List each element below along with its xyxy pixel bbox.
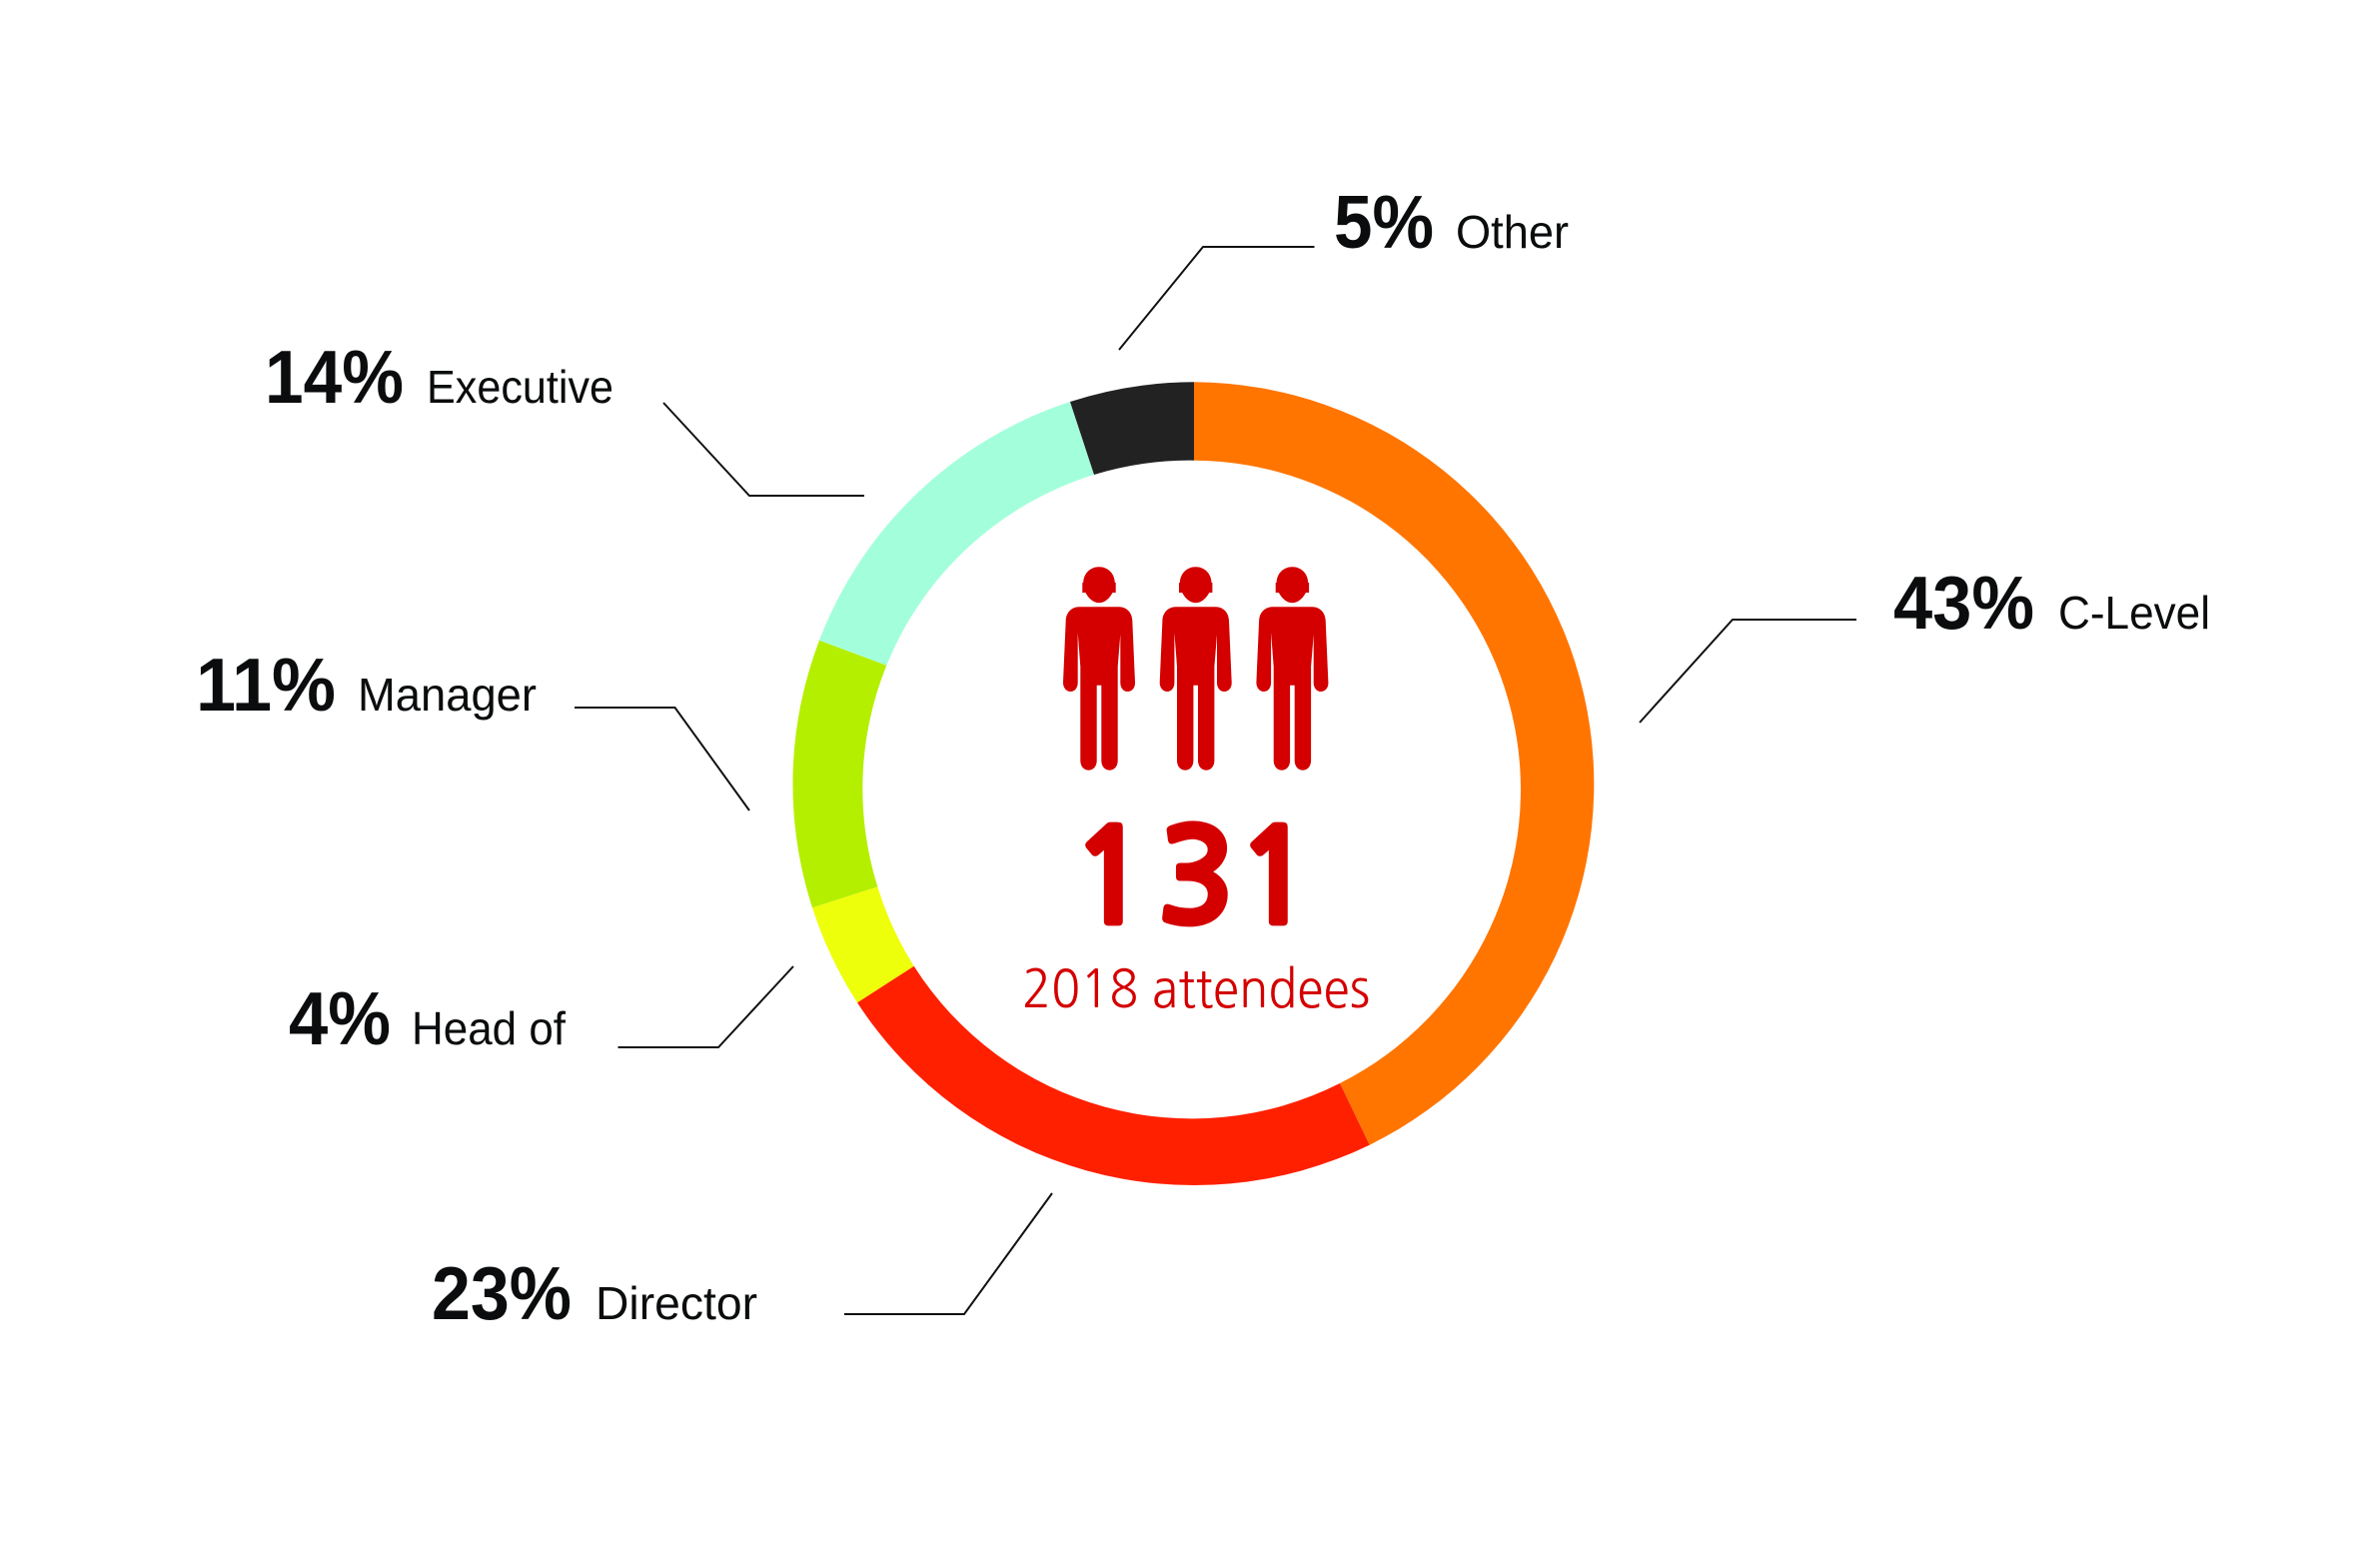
value: 23% xyxy=(432,1251,572,1335)
leader line xyxy=(1640,620,1856,723)
leader line xyxy=(575,708,749,810)
segment: Executive 14% xyxy=(819,402,1094,666)
value: 43% xyxy=(1893,561,2034,645)
label: Director xyxy=(595,1277,757,1329)
value: 14% xyxy=(265,335,404,419)
callout: 23% Director xyxy=(432,1193,1052,1335)
segment: Director 23% xyxy=(857,966,1370,1185)
callout: 4% Head of xyxy=(289,966,793,1060)
label: Executive xyxy=(427,361,613,413)
icon: person 2 xyxy=(1160,567,1232,771)
segment: C-Level 43% xyxy=(1194,382,1594,1145)
leader line xyxy=(844,1193,1052,1314)
leader line xyxy=(1119,247,1315,350)
label: Manager xyxy=(358,669,537,721)
icon: person 3 xyxy=(1256,567,1328,771)
label: C-Level xyxy=(2058,587,2210,639)
icon: three people xyxy=(1063,567,1328,771)
donut chart xyxy=(792,382,1594,1185)
callout: 43% C-Level xyxy=(1640,561,2210,723)
callout: 14% Executive xyxy=(265,335,864,496)
value: 5% xyxy=(1334,180,1434,264)
total attendee count: 131 xyxy=(1071,815,1315,943)
segment: Other 5% xyxy=(1070,382,1194,475)
callout: 11% Manager xyxy=(196,643,749,810)
label: Head of xyxy=(412,1002,566,1054)
value: 4% xyxy=(289,976,391,1060)
value: 11% xyxy=(196,643,336,727)
leader line xyxy=(617,966,793,1047)
caption: 2018 attendees: 2018 attendees xyxy=(1022,963,1370,1015)
segment: Head of 4% xyxy=(812,886,914,1002)
icon: person 1 xyxy=(1063,567,1135,771)
segment: Manager 11% xyxy=(792,641,886,907)
callout: 5% Other xyxy=(1119,180,1569,350)
leader line xyxy=(663,403,864,496)
label: Other xyxy=(1456,206,1569,258)
